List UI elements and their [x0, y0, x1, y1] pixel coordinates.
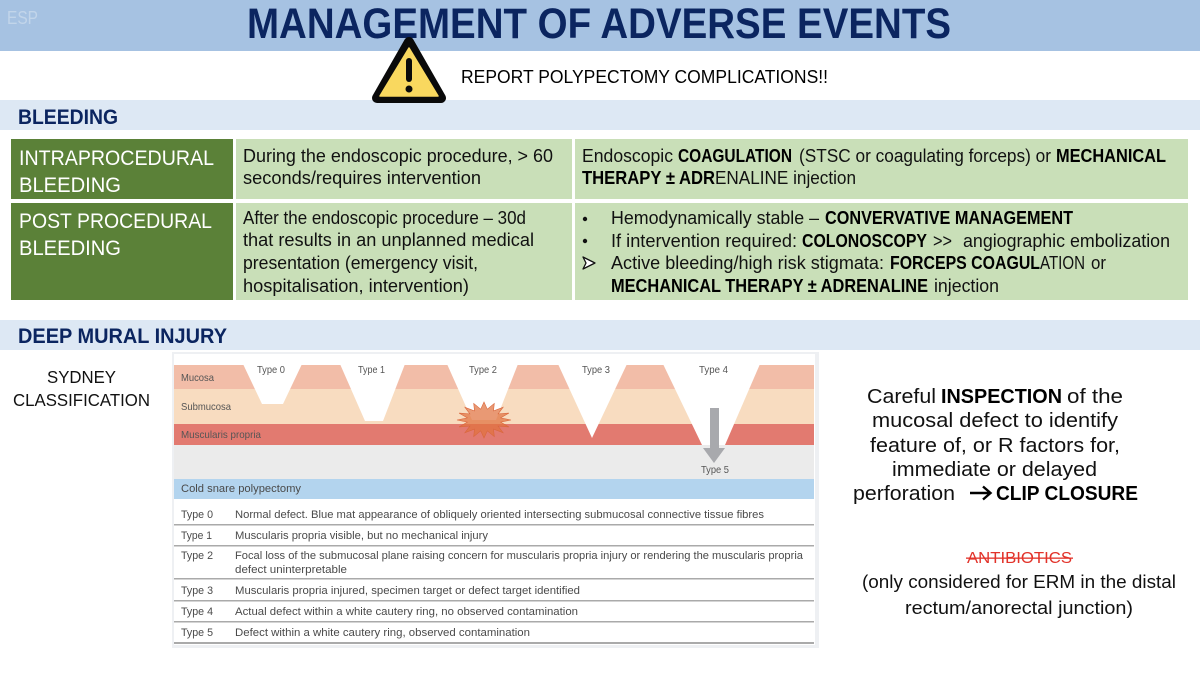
section band: deep mural injury: DEEP MURAL INJURY	[18, 325, 227, 348]
text block: careful inspection and clip closure: mucosal defect to identify	[872, 410, 1118, 432]
arrow: type 5 perforation	[703, 408, 725, 463]
diagram: defect types across colon wall layers: Submucosa	[181, 401, 231, 413]
row: post procedural bleeding: that results in an unplanned medical	[243, 230, 534, 250]
diagram: defect types across colon wall layers: Type 3	[582, 364, 610, 376]
label: sydney classification	[13, 367, 150, 410]
table: type definitions: Type 3	[181, 585, 213, 597]
table: type definitions: Type 4	[181, 606, 213, 618]
table: type definitions: defect uninterpretable	[235, 564, 347, 576]
text block: careful inspection and clip closure: Careful	[867, 386, 936, 408]
row: post procedural bleeding: MECHANICAL THERAPY ± ADRENALINE	[611, 276, 928, 296]
table: type definitions: Type 5	[181, 627, 213, 639]
row: intraprocedural bleeding: seconds/requires intervention	[243, 168, 481, 188]
diagram: defect types across colon wall layers: Muscularis propria	[181, 429, 261, 441]
text block: careful inspection and clip closure: INSPECTION	[941, 386, 1062, 408]
section band: deep mural injury	[0, 320, 1200, 350]
row: post procedural bleeding: angiographic embolization	[963, 231, 1170, 251]
table: type definitions: Type 1	[181, 530, 212, 542]
row: intraprocedural bleeding: THERAPY ± ADR	[582, 168, 715, 188]
table heading: cold snare polypectomy: Cold snare polypectomy	[181, 483, 301, 495]
row: post procedural bleeding: or	[1091, 253, 1106, 273]
text block: careful inspection and clip closure: immediate or delayed	[892, 459, 1097, 481]
row: post procedural bleeding: hospitalisation, intervention)	[243, 276, 469, 296]
section band: bleeding: BLEEDING	[18, 106, 118, 129]
label: sydney classification: SYDNEY	[47, 367, 116, 387]
diagram: defect types across colon wall layers: Mucosa	[181, 372, 214, 384]
table: type definitions: Type 2	[181, 550, 213, 562]
diagram: defect types across colon wall layers: Type 2	[469, 364, 497, 376]
row: intraprocedural bleeding: COAGULATION	[678, 146, 792, 166]
icon: warning triangle	[377, 42, 441, 98]
panel: sydney classification figure	[172, 352, 819, 648]
table: type definitions: Defect within a white cautery ring, observed contamination	[235, 627, 530, 639]
section band: bleeding	[0, 100, 1200, 130]
row: post procedural bleeding: COLONOSCOPY	[802, 231, 927, 251]
callout: report complications: REPORT POLYPECTOMY COMPLICATIONS!!	[461, 67, 828, 87]
table: type definitions: Muscularis propria visible, but no mechanical injury	[235, 530, 488, 542]
text block: careful inspection and clip closure: CLIP CLOSURE	[996, 483, 1138, 505]
row: post procedural bleeding: Active bleeding/high risk stigmata:	[611, 253, 884, 273]
table: bleeding types	[11, 139, 1188, 300]
text block: antibiotics note	[862, 550, 1176, 618]
text block: antibiotics note: rectum/anorectal junction)	[905, 597, 1133, 618]
diagram: defect types across colon wall layers: Type 5	[701, 464, 729, 476]
table: type definitions: Normal defect. Blue mat appearance of obliquely oriented intersecting submucosal connective tissue fibres	[235, 509, 765, 521]
row: intraprocedural bleeding: BLEEDING	[19, 174, 121, 197]
table: type definitions: Actual defect within a white cautery ring, no observed contamination	[235, 606, 578, 618]
title banner: MANAGEMENT OF ADVERSE EVENTS	[247, 0, 951, 48]
row: post procedural bleeding: presentation (emergency visit,	[243, 253, 478, 273]
table: type definitions: Type 0	[181, 509, 213, 521]
row: post procedural bleeding: POST PROCEDURAL	[19, 210, 212, 233]
title banner	[0, 0, 1200, 51]
row: post procedural bleeding: After the endoscopic procedure – 30d	[243, 208, 526, 228]
row: post procedural bleeding	[11, 203, 1188, 300]
table heading: cold snare polypectomy	[174, 479, 814, 499]
diagram: defect types across colon wall layers: Type 1	[358, 364, 385, 376]
row: post procedural bleeding: CONVERVATIVE MANAGEMENT	[825, 208, 1073, 228]
text block: antibiotics note: ANTIBIOTICS	[967, 550, 1072, 567]
table: type definitions: Focal loss of the submucosal plane raising concern for muscularis propria injury or rendering the muscularis propria	[235, 550, 804, 562]
row: intraprocedural bleeding: During the endoscopic procedure, > 60	[243, 146, 553, 166]
row: intraprocedural bleeding: INTRAPROCEDURAL	[19, 147, 214, 170]
row: post procedural bleeding: Hemodynamically stable –	[611, 208, 819, 228]
row: intraprocedural bleeding: (STSC or coagulating forceps) or	[799, 146, 1051, 166]
row: intraprocedural bleeding: Endoscopic	[582, 146, 673, 166]
row: post procedural bleeding: >>	[933, 231, 952, 251]
row: intraprocedural bleeding	[11, 139, 1188, 199]
row: post procedural bleeding: ATION	[1040, 253, 1085, 273]
text block: careful inspection and clip closure	[853, 386, 1138, 505]
icon: starburst type 2 injury	[457, 402, 511, 438]
row: intraprocedural bleeding: ENALINE injection	[715, 168, 856, 188]
row: post procedural bleeding: FORCEPS COAGUL	[890, 253, 1040, 273]
text block: careful inspection and clip closure: feature of, or R factors for,	[870, 435, 1120, 457]
label: sydney classification: CLASSIFICATION	[13, 390, 150, 410]
diagram: defect types across colon wall layers: Type 4	[699, 364, 728, 376]
row: post procedural bleeding: If intervention required:	[611, 231, 797, 251]
diagram: defect types across colon wall layers: Type 0	[257, 364, 285, 376]
table: type definitions: Muscularis propria injured, specimen target or defect target identified	[235, 585, 580, 597]
row: post procedural bleeding: BLEEDING	[19, 237, 121, 260]
row: post procedural bleeding: injection	[934, 276, 999, 296]
table: type definitions	[174, 509, 814, 644]
title banner: ESP	[7, 8, 38, 28]
row: intraprocedural bleeding: MECHANICAL	[1056, 146, 1166, 166]
diagram: defect types across colon wall layers	[174, 364, 814, 479]
text block: careful inspection and clip closure: perforation	[853, 483, 955, 505]
text block: antibiotics note: (only considered for ERM in the distal	[862, 571, 1176, 592]
text block: careful inspection and clip closure: of the	[1067, 386, 1123, 408]
